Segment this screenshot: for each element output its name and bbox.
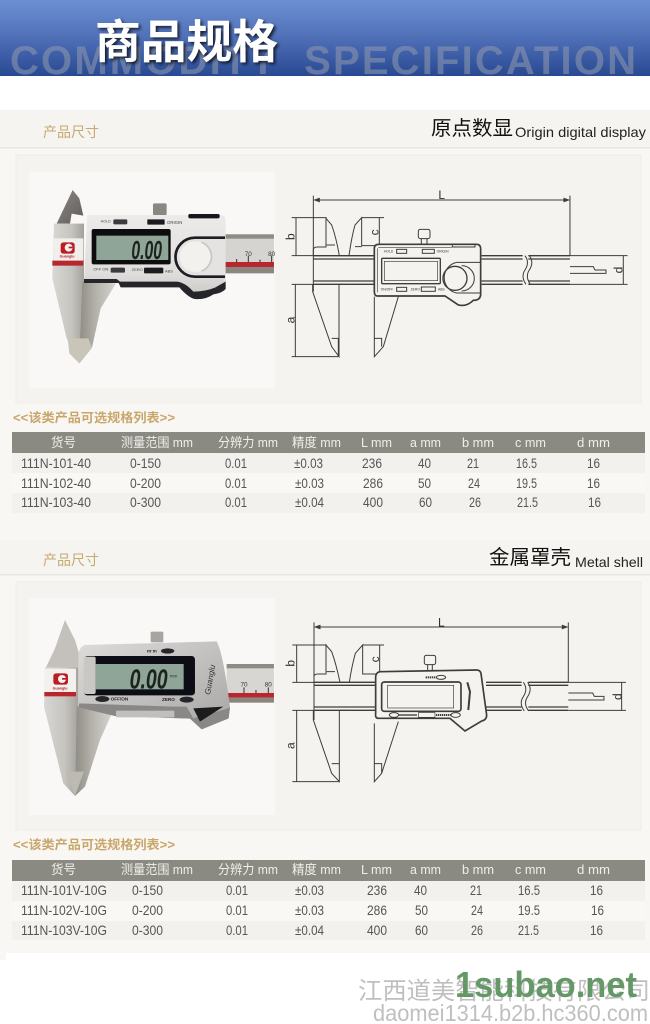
row 111N-102V-10G: 0.01 [226,902,248,918]
site watermark: 1subao.net [455,964,637,1005]
header row: c mm [515,862,546,877]
row 111N-103V-10G: 60 [415,922,428,938]
metal body [78,641,230,729]
fixed jaw [52,224,84,363]
row 111N-103-40 [21,494,601,510]
row 111N-103V-10G: 111N-103V-10G [21,922,107,938]
header row: L mm [361,435,392,450]
row 111N-102-40: 111N-102-40 [21,475,91,491]
scale beam: 80 [268,251,276,258]
row 111N-102-40: 0-200 [130,475,161,491]
dimension c: c [368,656,382,662]
buttons and labels: Guanglu [203,663,217,695]
row 111N-103V-10G: 0.01 [226,922,248,938]
LCD display: 0.00 [131,235,162,265]
row 111N-102V-10G: 50 [415,902,428,918]
row 111N-102V-10G: 24 [471,902,483,918]
header row: b mm [462,435,494,450]
row 111N-103V-10G: 16 [590,922,603,938]
LCD display: mm [170,673,178,678]
row 111N-101V-10G: 0-150 [132,882,163,898]
row 111N-103-40: 0-300 [130,494,161,510]
row 111N-102-40: 50 [418,475,431,491]
caliper outline: ORIGIN [437,250,449,254]
knob [151,632,163,642]
row 111N-101-40: 111N-101-40 [21,455,91,471]
row 111N-101V-10G: 40 [414,882,427,898]
banner English watermark: COMMODITY SPECIFICATION [10,39,636,83]
row 111N-101V-10G: 16.5 [518,882,540,898]
scale beam: 70 [245,251,252,258]
row 111N-102-40: 24 [468,475,480,491]
knob [153,203,167,215]
upper jaws [57,190,83,224]
moving jaw [75,707,112,796]
row 111N-103V-10G: 26 [471,922,483,938]
header row: 分辨力 mm [218,862,278,877]
row 111N-102-40: 286 [363,475,383,491]
dimension L [314,615,568,720]
header row: b mm [462,862,494,877]
header row: 分辨力 mm [218,435,278,450]
section 1 product title: 原点数显 [431,117,513,140]
buttons and labels: OFF/ON [111,697,129,702]
section 1 product panel [16,155,641,403]
row 111N-101-40: 21 [467,455,479,471]
section 2 table caption: <<该类产品可选规格列表>> [13,837,175,852]
thumb wheel [175,238,225,277]
section 2 product panel [16,582,641,830]
section 1: origin digital display [0,110,650,513]
row 111N-102V-10G: 16 [591,902,604,918]
row 111N-102-40: ±0.03 [295,475,324,491]
company name watermark: 江西道美智能科技有限公司 [358,978,650,1005]
row 111N-101-40: ±0.03 [294,455,323,471]
section 2 photo: metal shell caliper [29,598,275,815]
caliper outline: ABS [438,288,445,292]
row 111N-103-40: 26 [469,494,481,510]
scale beam [227,664,274,703]
buttons and labels: HOLD [101,220,111,224]
row 111N-102V-10G: 0-200 [132,902,163,918]
LCD display [92,229,171,265]
dimension b: b [284,660,298,667]
moving jaw [79,282,116,363]
header row: 精度 mm [292,862,341,877]
footer watermarks [358,964,650,1024]
banner title: 商品规格 [95,16,278,68]
caliper outline [313,218,606,357]
section 1 photo: digital caliper [29,172,276,388]
body [84,215,226,299]
jaw tip [68,338,92,363]
row 111N-101V-10G: 236 [367,882,387,898]
scale beam: 80 [265,682,272,689]
section 1 table caption: <<该类产品可选规格列表>> [13,410,175,425]
scale beam [223,234,276,273]
row 111N-101V-10G: 0.01 [226,882,248,898]
row 111N-103-40: 21.5 [517,494,538,510]
LCD display: 0.00 [130,663,168,694]
row 111N-103-40: 111N-103-40 [21,494,91,510]
dimension a [284,284,338,357]
row 111N-101V-10G: 21 [470,882,482,898]
buttons and labels: ABS [165,268,173,273]
dimension d: d [610,693,624,700]
row 111N-103V-10G: 400 [367,922,387,938]
row 111N-101-40: 40 [418,455,431,471]
section 2: metal shell [0,540,650,940]
dimension L: L [438,615,445,629]
section 2 heading bar [0,540,650,576]
scale beam: 70 [240,682,248,689]
header row: a mm [410,862,441,877]
buttons and labels: ZERO [162,697,175,702]
header row: 货号 [51,862,76,877]
row 111N-102V-10G: 111N-102V-10G [21,902,107,918]
row 111N-103V-10G: ±0.04 [295,922,324,938]
logo plate [52,238,83,266]
header row [51,862,610,877]
dimension b [284,218,377,256]
header row: a mm [410,435,441,450]
row 111N-102-40: 0.01 [225,475,247,491]
header row: 精度 mm [292,435,341,450]
buttons and labels [95,648,217,703]
section 1 left label: 产品尺寸 [43,124,99,140]
section 2 left label: 产品尺寸 [43,552,99,568]
row 111N-101-40: 0-150 [130,455,161,471]
row 111N-103-40: 400 [363,494,383,510]
upper jaw [46,620,80,667]
row 111N-101V-10G [21,882,603,898]
section 1 product English title: Origin digital display [515,124,646,140]
fixed jaw [44,667,78,796]
dimension a: a [284,316,298,323]
header banner [0,0,650,83]
row 111N-102-40: 19.5 [516,475,537,491]
row 111N-101-40: 236 [362,455,382,471]
dimension d [568,682,626,710]
header row: d mm [577,435,610,450]
dimension c [362,218,384,245]
dimension a [284,710,339,782]
row 111N-103-40: ±0.04 [295,494,324,510]
dimension c [363,645,384,671]
header row: 货号 [51,435,76,450]
buttons and labels [93,214,220,273]
buttons and labels: ZERO [132,267,143,272]
caliper outline: ZERO [411,288,420,292]
row 111N-103-40: 16 [588,494,601,510]
row 111N-102V-10G: ±0.03 [295,902,324,918]
caliper outline [313,645,604,782]
dimension d: d [612,267,626,273]
header row: 测量范围 mm [121,435,193,450]
dimension b: b [284,233,298,240]
row 111N-103V-10G: 0-300 [132,922,163,938]
logo plate [44,669,76,696]
section 1 heading bar [0,110,650,148]
buttons and labels: OFF ON [93,266,108,271]
buttons and labels: ORIGIN [167,220,182,225]
row 111N-101-40: 16 [587,455,600,471]
dimension c: c [368,229,382,235]
row 111N-101V-10G: 16 [590,882,603,898]
row 111N-103-40: 60 [419,494,432,510]
LCD display [84,656,195,695]
logo plate: Guanglu [60,255,74,259]
row 111N-101V-10G: ±0.03 [295,882,324,898]
section 2 product English title: Metal shell [575,554,643,570]
bottom white step [6,953,650,961]
row 111N-101V-10G: 111N-101V-10G [21,882,107,898]
row 111N-101-40 [21,455,600,471]
row 111N-102V-10G: 286 [367,902,387,918]
row 111N-103V-10G: 21.5 [518,922,539,938]
dimension a: a [284,742,298,749]
caliper outline: ON/OFF [381,288,393,292]
header row: L mm [361,862,392,877]
row 111N-103V-10G [21,922,603,938]
header row: c mm [515,435,546,450]
logo plate: Guanglu [53,686,67,690]
section 2 dimension drawing [284,615,626,782]
section 2 product title: 金属罩壳 [489,546,571,569]
section 2 spec table [12,860,645,940]
dimension L: L [438,188,445,202]
section 1 dimension drawing [284,188,628,357]
row 111N-103-40: 0.01 [225,494,247,510]
header row: d mm [577,862,610,877]
row 111N-102-40 [21,475,600,491]
dimension d [570,256,628,284]
header row: 测量范围 mm [121,862,193,877]
section 1 spec table [12,432,645,513]
row 111N-102-40: 16 [587,475,600,491]
header row [51,435,610,450]
caliper outline: HOLD [384,250,394,254]
row 111N-101-40: 0.01 [225,455,247,471]
row 111N-102V-10G [21,902,604,918]
row 111N-101-40: 16.5 [516,455,537,471]
row 111N-102V-10G: 19.5 [518,902,540,918]
dimension b [284,645,377,682]
dimension L [313,188,570,292]
buttons and labels: m·m [147,648,157,653]
